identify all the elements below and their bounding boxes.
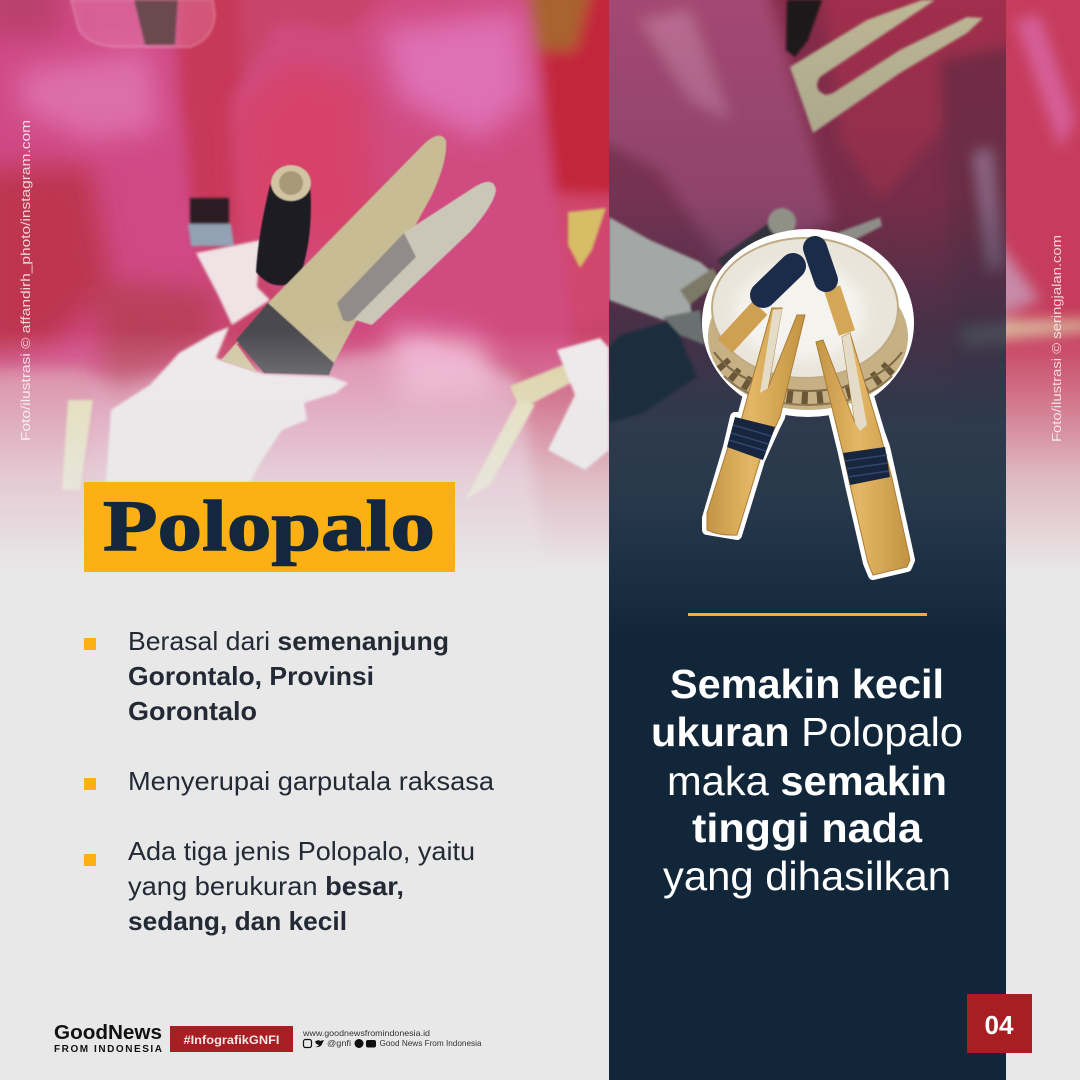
gold sleeve trim	[568, 208, 606, 268]
callout statement: maka semakin	[667, 758, 947, 804]
footer contact details: Good News From Indonesia	[380, 1038, 482, 1048]
photo credit right: Foto/ilustrasi © seringjalan.com	[1050, 235, 1064, 442]
dimmed hand, mallet and band	[609, 208, 882, 423]
hair strand	[786, 0, 822, 57]
hashtag badge: #InfografikGNFI	[184, 1033, 280, 1047]
callout statement	[651, 661, 963, 899]
bullet 3: yang berukuran besar,	[128, 871, 404, 901]
bullet 1: Gorontalo, Provinsi	[128, 661, 374, 691]
callout statement: Semakin kecil	[670, 661, 944, 707]
centre panel: navy with faded photo	[609, 0, 1006, 1080]
callout statement: yang dihasilkan	[663, 853, 951, 899]
icon: facebook	[354, 1039, 364, 1048]
photo credit left: Foto/ilustrasi © affandirh_photo/instagram.com	[19, 120, 33, 441]
bullet 2: Menyerupai garputala raksasa	[128, 766, 495, 796]
title: Polopalo: Polopalo	[103, 486, 435, 566]
logo: GoodNews From Indonesia	[54, 1022, 162, 1055]
bullet 3: Ada tiga jenis Polopalo, yaitu	[128, 836, 475, 866]
bullet 3	[84, 836, 475, 936]
logo: GoodNews From Indonesia: GoodNews	[54, 1022, 162, 1044]
fork in photo	[790, 0, 983, 133]
divider line	[688, 613, 927, 616]
polopalo fork left	[707, 308, 805, 535]
bullet 1: Gorontalo	[128, 696, 257, 726]
callout statement: tinggi nada	[692, 805, 923, 851]
face shield and hair	[71, 0, 234, 246]
logo: GoodNews From Indonesia: FROM INDONESIA	[54, 1044, 162, 1055]
polopalo instrument	[221, 136, 496, 375]
hashtag badge	[170, 1026, 293, 1052]
small mallets	[725, 248, 847, 346]
lace trims and far hand	[62, 338, 609, 500]
polopalo fork right	[816, 333, 910, 575]
mallet with black grip	[256, 165, 311, 285]
faded robes	[609, 0, 958, 408]
drum	[708, 238, 908, 410]
illustration: drum and polopalo cut-out	[707, 234, 910, 575]
bullet 3: sedang, dan kecil	[128, 906, 347, 936]
page number	[967, 994, 1032, 1053]
bullet 1: Berasal dari semenanjung	[128, 626, 449, 656]
icon: instagram	[304, 1040, 312, 1048]
right photo strip	[1006, 0, 1080, 556]
footer contact details: www.goodnewsfromindonesia.id	[302, 1028, 430, 1038]
bullet list	[84, 626, 495, 936]
hand behind mallet	[196, 240, 270, 325]
footer contact details: @gnfi	[327, 1038, 351, 1048]
soft robe colour areas	[0, 0, 609, 532]
icon: youtube	[366, 1040, 376, 1048]
white sticker outline	[707, 234, 910, 575]
page number: 04	[985, 1010, 1014, 1040]
callout statement: ukuran Polopalo	[651, 709, 963, 755]
title: Polopalo	[84, 482, 455, 572]
icon: twitter	[315, 1040, 324, 1047]
footer contact details	[302, 1028, 482, 1048]
hand holding instrument	[106, 327, 348, 482]
bullet 1	[84, 626, 449, 726]
left photo: performer holding polopalo	[0, 0, 609, 554]
